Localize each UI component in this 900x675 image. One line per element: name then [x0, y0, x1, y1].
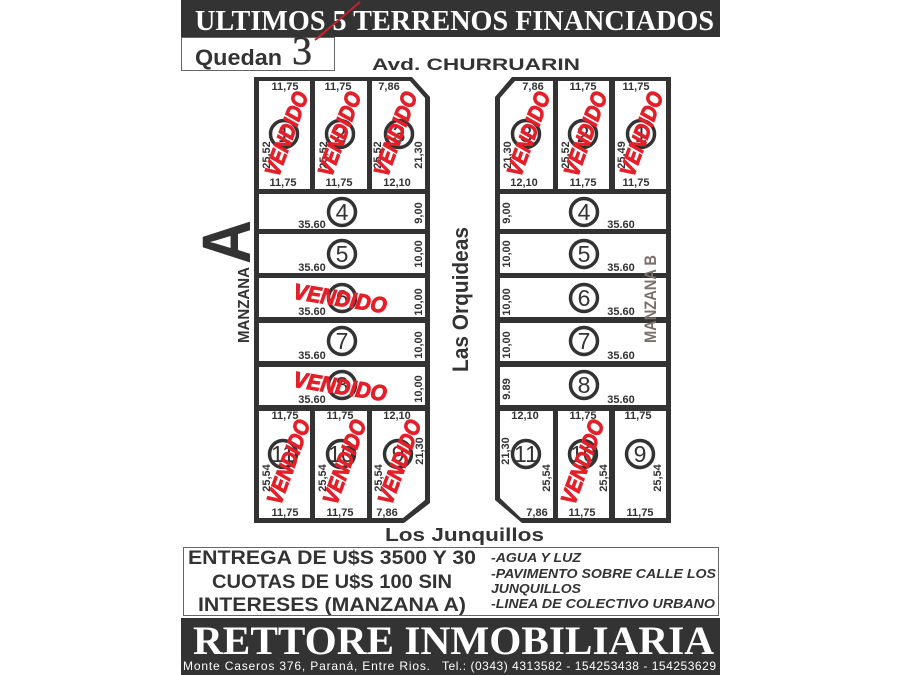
street label: Avd. Churruarin: Avd. CHURRUARIN — [372, 55, 580, 74]
lot dimensions: 11,75 — [623, 81, 649, 93]
lot dimensions: 10,00 — [501, 288, 513, 316]
panel: manzana A plan — [254, 77, 430, 523]
lot numbers — [512, 120, 654, 468]
sold stamps: VENDIDO — [615, 88, 668, 179]
lot numbers — [270, 120, 412, 468]
services list: -PAVIMENTO SOBRE CALLE LOS — [491, 566, 716, 581]
services list: -LINEA DE COLECTIVO URBANO — [491, 596, 715, 611]
sold stamps: VENDIDO — [292, 279, 388, 318]
lot dimensions: 12,10 — [511, 410, 539, 422]
sold stamps: VENDIDO — [556, 416, 609, 507]
lot numbers: 11 — [514, 441, 538, 467]
lot numbers: 5 — [578, 241, 590, 267]
financing terms: ENTREGA DE U$S 3500 Y 30 — [188, 548, 476, 569]
street label: Los Junquillos: Los Junquillos — [385, 525, 544, 545]
lot numbers: 11 — [271, 441, 295, 467]
sold stamps: VENDIDO — [502, 88, 555, 179]
lot dimensions: 25,54 — [373, 463, 385, 492]
street label: Las Orquideas: Las Orquideas — [448, 227, 473, 372]
lot dimensions: 7,86 — [378, 81, 400, 93]
financing and services box — [184, 548, 718, 616]
lot dimensions: 11,75 — [327, 507, 353, 519]
lot dimensions: 25,52 — [318, 141, 330, 169]
lot dimensions: 35.60 — [298, 219, 326, 231]
lot dimensions: 11,75 — [623, 177, 649, 189]
lot dimensions: 7,86 — [526, 507, 548, 519]
financing terms: CUOTAS DE U$S 100 SIN — [212, 572, 452, 593]
lots — [259, 81, 425, 518]
remaining count box: 3 — [292, 28, 312, 73]
lot dimensions: 35.60 — [607, 394, 635, 406]
sold stamps: VENDIDO — [262, 416, 315, 507]
lot dimensions: 25,54 — [652, 463, 664, 492]
lot dimensions: 10,00 — [413, 375, 425, 403]
sold stamps: VENDIDO — [292, 367, 388, 406]
lot dimensions: 35.60 — [298, 262, 326, 274]
lot dimensions: 11,75 — [326, 177, 352, 189]
lot dimensions: 9,00 — [413, 202, 425, 224]
sold stamps — [260, 88, 426, 507]
block outline — [495, 77, 671, 523]
lot dimensions: 7,86 — [376, 507, 398, 519]
sold stamps: VENDIDO — [313, 88, 366, 179]
lot dimensions: 12,10 — [383, 410, 411, 422]
lot numbers: 2 — [577, 121, 589, 147]
lot dimensions: 25,54 — [317, 463, 329, 492]
lot dimensions: 10,00 — [501, 331, 513, 359]
lot dimensions: 21,30 — [500, 437, 512, 465]
lot dimensions: 25,52 — [372, 141, 384, 169]
services list: JUNQUILLOS — [491, 581, 581, 596]
lot numbers: 4 — [336, 199, 349, 225]
lot dimensions — [500, 81, 664, 519]
lot numbers: 7 — [578, 328, 590, 354]
lot numbers: 6 — [336, 285, 348, 311]
lot numbers: 10 — [570, 441, 596, 467]
sold stamps: VENDIDO — [318, 416, 371, 507]
lot numbers: 9 — [392, 441, 404, 467]
lot dimensions: 11,75 — [569, 507, 595, 519]
lot numbers: 8 — [578, 372, 590, 398]
block outline — [254, 77, 430, 523]
financing terms: INTERESES (MANZANA A) — [198, 595, 466, 616]
lot dimensions: 11,75 — [627, 507, 653, 519]
lot numbers: 3 — [520, 121, 532, 147]
lot dimensions — [261, 81, 426, 519]
lot dimensions: 35.60 — [607, 350, 635, 362]
lot dimensions: 21,30 — [413, 141, 425, 169]
sold stamps: VENDIDO — [373, 416, 426, 507]
lot dimensions: 7,86 — [522, 81, 544, 93]
lot dimensions: 11,75 — [625, 410, 651, 422]
financing terms — [188, 548, 476, 616]
lot dimensions: 35.60 — [298, 306, 326, 318]
header banner: ULTIMOS 5 TERRENOS FINANCIADOS — [195, 6, 714, 37]
lot dimensions: 35.60 — [298, 350, 326, 362]
lot numbers: 1 — [278, 121, 290, 147]
lot numbers: 9 — [634, 441, 646, 467]
lot dimensions: 25,54 — [261, 463, 273, 492]
lot numbers: 4 — [578, 199, 591, 225]
lot numbers: 10 — [328, 441, 354, 467]
lot numbers: 3 — [393, 121, 405, 147]
lot dimensions: 11,75 — [272, 507, 298, 519]
sold stamps — [502, 88, 668, 507]
lot dimensions: 25,49 — [616, 141, 628, 169]
panel: manzana B plan — [495, 77, 671, 523]
sold stamps: VENDIDO — [559, 88, 612, 179]
services list: -AGUA Y LUZ — [491, 550, 582, 565]
lot dimensions: 21,30 — [414, 437, 426, 465]
services list — [491, 550, 716, 611]
lot numbers: 7 — [336, 328, 348, 354]
lot dimensions: 9.89 — [501, 378, 513, 400]
lot dimensions: 25,54 — [598, 463, 610, 492]
lot dimensions: 35.60 — [607, 262, 635, 274]
lot dimensions: 11,75 — [327, 410, 353, 422]
footer banner: Monte Caseros 376, Paraná, Entre Rios. — [183, 659, 430, 673]
remaining count box — [182, 28, 334, 73]
lot dimensions: 11,75 — [570, 177, 596, 189]
sold stamps: VENDIDO — [369, 88, 422, 179]
lot dimensions: 10,00 — [413, 331, 425, 359]
lot dimensions: 25,54 — [541, 463, 553, 492]
lot dimensions: 11,75 — [325, 81, 351, 93]
lot dimensions: 10,00 — [501, 240, 513, 268]
footer banner: RETTORE INMOBILIARIA — [193, 618, 714, 663]
lot dimensions: 10,00 — [413, 240, 425, 268]
lots — [500, 81, 666, 518]
lot dimensions: 12,10 — [510, 177, 538, 189]
lot numbers: 8 — [336, 372, 348, 398]
block label: Manzana A: MANZANA — [236, 267, 253, 343]
lot dimensions: 35.60 — [298, 394, 326, 406]
lot dimensions: 21,30 — [502, 141, 514, 169]
lot numbers: 6 — [578, 285, 590, 311]
lot dimensions: 11,75 — [570, 410, 596, 422]
remaining count box: Quedan — [195, 45, 282, 70]
block label: Manzana A — [188, 220, 265, 343]
lot dimensions: 35.60 — [607, 306, 635, 318]
lot dimensions: 11,75 — [272, 81, 298, 93]
lot dimensions: 25,52 — [560, 141, 572, 169]
lot numbers: 2 — [334, 121, 346, 147]
lot dimensions: 11,75 — [270, 177, 296, 189]
lot numbers: 1 — [635, 121, 647, 147]
lot dimensions: 12,10 — [383, 177, 411, 189]
lot numbers: 5 — [336, 241, 348, 267]
block label: Manzana B: MANZANA B — [641, 255, 660, 343]
lot dimensions: 25,52 — [261, 141, 273, 169]
lot dimensions: 11,75 — [570, 81, 596, 93]
lot dimensions: 35.60 — [607, 219, 635, 231]
footer banner: Tel.: (0343) 4313582 - 154253438 - 154253629 — [442, 659, 716, 673]
lot dimensions: 10,00 — [413, 288, 425, 316]
block label: Manzana A: A — [188, 220, 265, 264]
lot dimensions: 9,00 — [501, 202, 513, 224]
lot dimensions: 11,75 — [272, 410, 298, 422]
sold stamps: VENDIDO — [260, 88, 313, 179]
